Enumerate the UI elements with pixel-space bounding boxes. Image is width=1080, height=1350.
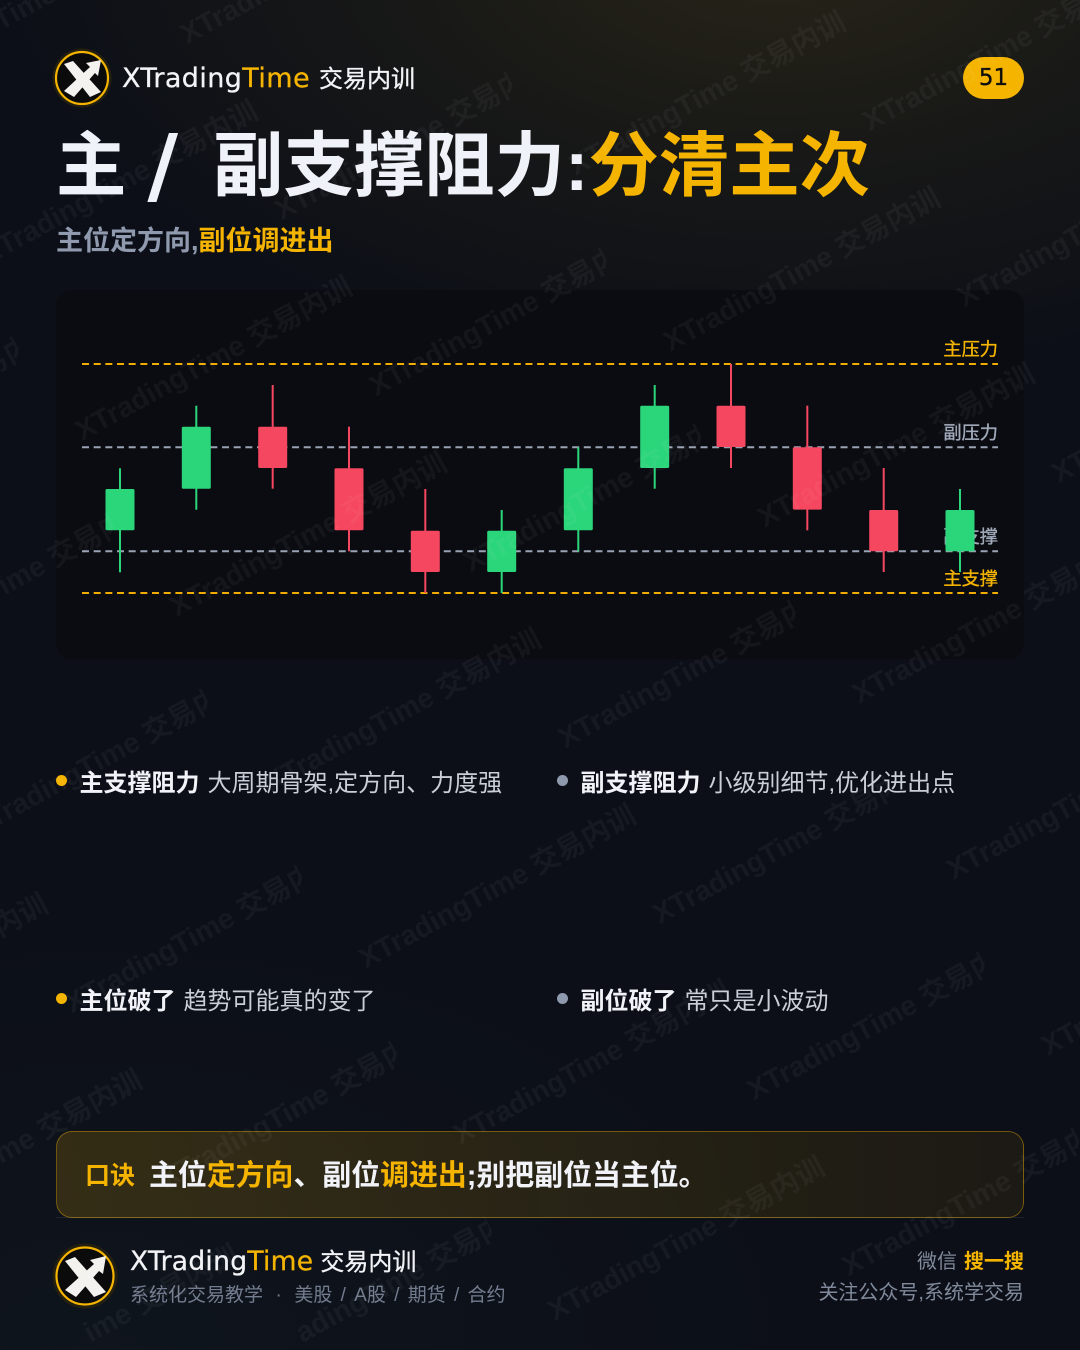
watermark: adingTime 交易内训 — [290, 1195, 538, 1349]
watermark: XTradingTime 交易内训 — [553, 579, 841, 755]
watermark: XTradingTime 交易内训 — [543, 1151, 830, 1327]
watermark: XTradingTime 交易内训 — [658, 182, 946, 358]
watermark: XTradingTime 交易内训 — [753, 358, 1040, 534]
page number badge: 51 — [979, 65, 1008, 91]
footer call to action: 微信 搜一搜 — [917, 1251, 1024, 1273]
watermark: XTradingTime 交易内训 — [448, 975, 736, 1151]
watermark: XTradingTime 交易内训 — [742, 931, 1030, 1107]
watermark: XTradingTime 交易内训 — [270, 51, 557, 227]
chart: support and resistance candlesticks — [82, 340, 998, 594]
bullet: minor support and resistance: 副支撑阻力 小级别细节,优化进出点 — [580, 770, 955, 797]
watermark: XTradingTime 交易内训 — [259, 623, 547, 799]
watermark: XTradingTime 交易内训 — [165, 447, 452, 623]
bullet: major support and resistance: 主支撑阻力 大周期骨架,定方向、力度强 — [80, 770, 502, 797]
watermark: XTradingTime 交易内训 — [70, 271, 358, 447]
watermark: XTradingTime 交易内训 — [60, 844, 347, 1020]
watermark: XTradingTime 交易内训 — [564, 6, 851, 182]
logo: header — [52, 48, 112, 108]
candles — [106, 364, 974, 593]
bullet: minor level broken: 副位破了 常只是小波动 — [580, 988, 828, 1015]
callout label: 口诀 — [85, 1162, 135, 1190]
level labels: 副支撑 — [943, 527, 998, 547]
panel: candlestick chart — [56, 290, 1024, 659]
title: 主/ 副支撑阻力:分清主次 — [56, 116, 870, 214]
level labels — [943, 340, 998, 589]
level labels: 副压力 — [943, 423, 998, 443]
brand name: footer: XTradingTime 交易内训 — [130, 1242, 416, 1277]
watermark: XTradingTime 交易内训 — [364, 227, 652, 403]
footer tagline: 系统化交易教学 · 美股 / A股 / 期货 / 合约 — [130, 1285, 506, 1306]
footer note: 关注公众号,系统学交易 — [818, 1282, 1024, 1304]
logo: footer — [52, 1244, 118, 1308]
level labels: 主支撑 — [943, 569, 998, 589]
watermark: XTradingTime 交易内训 — [354, 799, 641, 975]
watermark: ime 交易内训 — [78, 1239, 244, 1349]
level labels: 主压力 — [943, 340, 998, 360]
watermark: XTradingTime 交易内训 — [459, 403, 746, 579]
brand name: header: XTradingTime 交易内训 — [122, 59, 415, 94]
callout text: 主位定方向、副位调进出;别把副位当主位。 — [149, 1160, 708, 1192]
watermark: XTradingTime 交易内训 — [648, 755, 935, 931]
watermark: XTradingTime 交易内训 — [154, 1020, 442, 1196]
callout: mnemonic — [56, 1131, 1024, 1218]
subtitle: 主位定方向,副位调进出 — [56, 226, 334, 256]
bullet: major level broken: 主位破了 趋势可能真的变了 — [80, 988, 376, 1015]
page number badge — [963, 57, 1024, 99]
footer rule — [56, 1217, 1024, 1218]
